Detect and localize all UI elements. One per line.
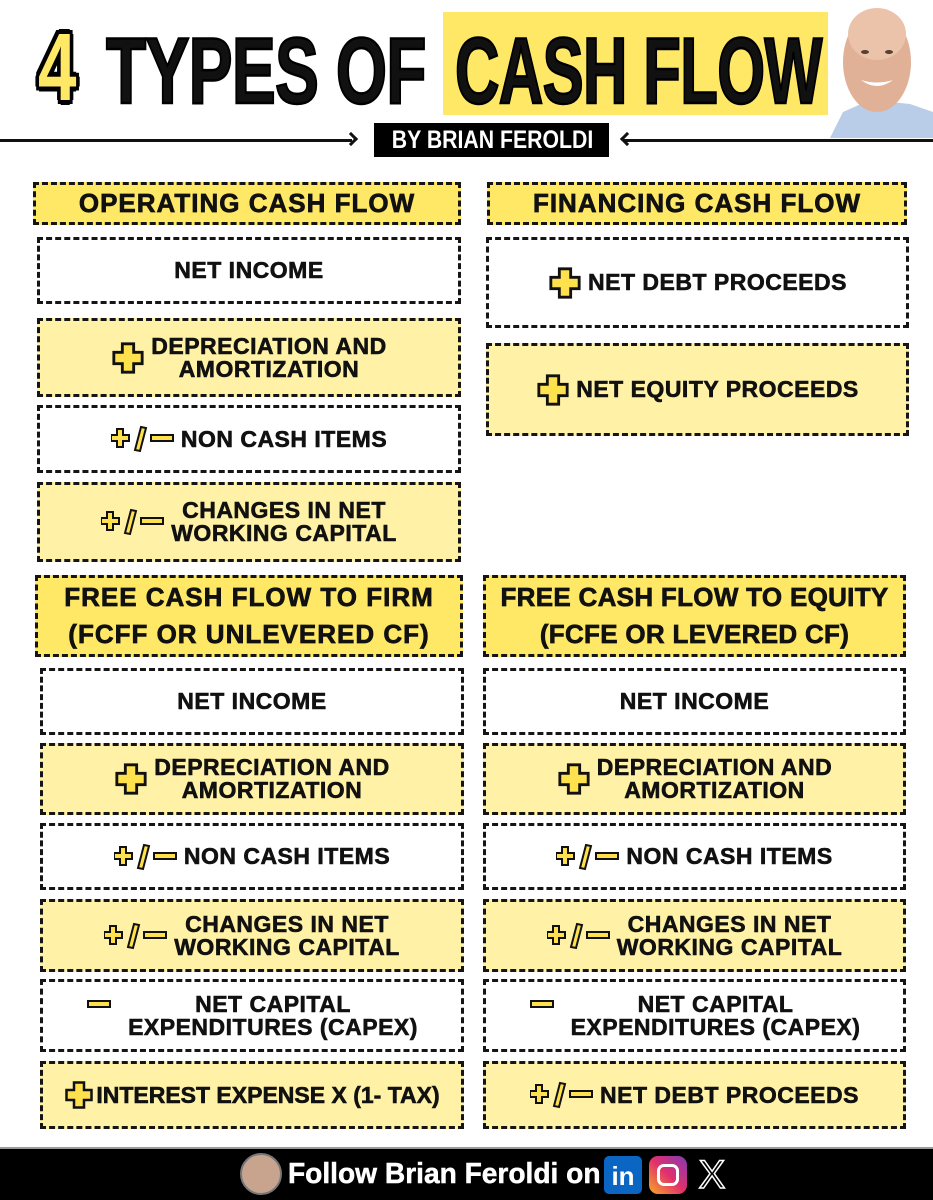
row: net income xyxy=(37,237,461,304)
panel: FCFE rows xyxy=(483,668,906,1129)
byline: BY BRIAN FEROLDI xyxy=(392,126,593,154)
panel header: financing cash flow: FINANCING CASH FLOW xyxy=(533,188,861,218)
row: capex: NET CAPITAL xyxy=(638,990,793,1016)
row: depreciation: AMORTIZATION xyxy=(624,777,805,803)
row: depreciation xyxy=(40,743,464,815)
row: net income: NET INCOME xyxy=(174,257,324,283)
row: working capital: WORKING CAPITAL xyxy=(171,520,397,546)
row: non cash items xyxy=(483,823,906,890)
panel header: operating cash flow: OPERATING CASH FLOW xyxy=(79,188,415,218)
row: net debt proceeds xyxy=(486,237,909,328)
row: capex xyxy=(483,979,906,1052)
row: non cash items: NON CASH ITEMS xyxy=(181,426,387,452)
row: net equity proceeds: NET EQUITY PROCEEDS xyxy=(576,376,859,402)
row: interest expense: INTEREST EXPENSE X (1- TAX) xyxy=(96,1082,440,1108)
title text: types of: TYPES OF xyxy=(106,18,426,123)
row: depreciation xyxy=(483,743,906,815)
row: working capital: WORKING CAPITAL xyxy=(617,934,842,960)
panel: financing cash flow rows xyxy=(486,237,909,436)
row: net debt proceeds: NET DEBT PROCEEDS xyxy=(600,1082,859,1108)
panel: FCFF rows xyxy=(40,668,464,1129)
row: net income: NET INCOME xyxy=(177,688,327,714)
row: depreciation: AMORTIZATION xyxy=(182,777,362,803)
byline arrows xyxy=(0,139,352,142)
row: working capital xyxy=(37,482,461,562)
panel header: FCFE: FREE CASH FLOW TO EQUITY xyxy=(500,582,889,612)
row: capex: EXPENDITURES (CAPEX) xyxy=(128,1014,418,1040)
panel header: FCFE xyxy=(483,575,906,657)
row: depreciation: AMORTIZATION xyxy=(179,356,359,382)
row: non cash items xyxy=(40,823,464,890)
author photo xyxy=(830,8,933,138)
row: depreciation: DEPRECIATION AND xyxy=(597,754,832,780)
row: depreciation: DEPRECIATION AND xyxy=(151,332,387,358)
row: working capital xyxy=(40,899,464,972)
row: net income: NET INCOME xyxy=(620,688,769,714)
footer avatar xyxy=(240,1153,282,1195)
row: depreciation: DEPRECIATION AND xyxy=(154,754,390,780)
row: working capital xyxy=(483,899,906,972)
title number 4: 4 xyxy=(38,14,76,121)
panel header: operating cash flow xyxy=(33,182,461,225)
panel header: financing cash flow xyxy=(487,182,907,225)
row: non cash items: NON CASH ITEMS xyxy=(184,843,390,869)
panel header: FCFF: FREE CASH FLOW TO FIRM xyxy=(64,582,434,612)
row: capex: EXPENDITURES (CAPEX) xyxy=(571,1014,860,1040)
row: net income xyxy=(483,668,906,735)
icon: x: X xyxy=(699,1153,725,1197)
panel header: FCFF: (FCFF OR UNLEVERED CF) xyxy=(68,619,430,649)
panel header: FCFE: (FCFE OR LEVERED CF) xyxy=(540,619,849,649)
row: capex: NET CAPITAL xyxy=(195,990,351,1016)
row: working capital: WORKING CAPITAL xyxy=(174,934,400,960)
row: net equity proceeds xyxy=(486,343,909,436)
title highlight: cash flow: CASH FLOW xyxy=(455,18,822,123)
row: net debt proceeds xyxy=(483,1061,906,1129)
row: capex xyxy=(40,979,464,1052)
icon: instagram xyxy=(649,1156,687,1194)
icon: linkedin: in xyxy=(611,1161,635,1191)
row: non cash items xyxy=(37,405,461,473)
row: interest expense xyxy=(40,1061,464,1129)
row: non cash items: NON CASH ITEMS xyxy=(626,843,833,869)
panel header: FCFF xyxy=(35,575,463,657)
footer text: Follow Brian Feroldi on xyxy=(288,1158,601,1190)
row: working capital: CHANGES IN NET xyxy=(185,910,389,936)
row: working capital: CHANGES IN NET xyxy=(182,497,386,523)
panel: operating cash flow rows xyxy=(37,237,461,562)
footer xyxy=(0,1147,933,1200)
row: working capital: CHANGES IN NET xyxy=(628,910,831,936)
row: depreciation xyxy=(37,318,461,397)
icon: linkedin xyxy=(604,1156,642,1194)
title xyxy=(35,12,828,123)
row: net debt proceeds: NET DEBT PROCEEDS xyxy=(588,269,847,295)
row: net income xyxy=(40,668,464,735)
